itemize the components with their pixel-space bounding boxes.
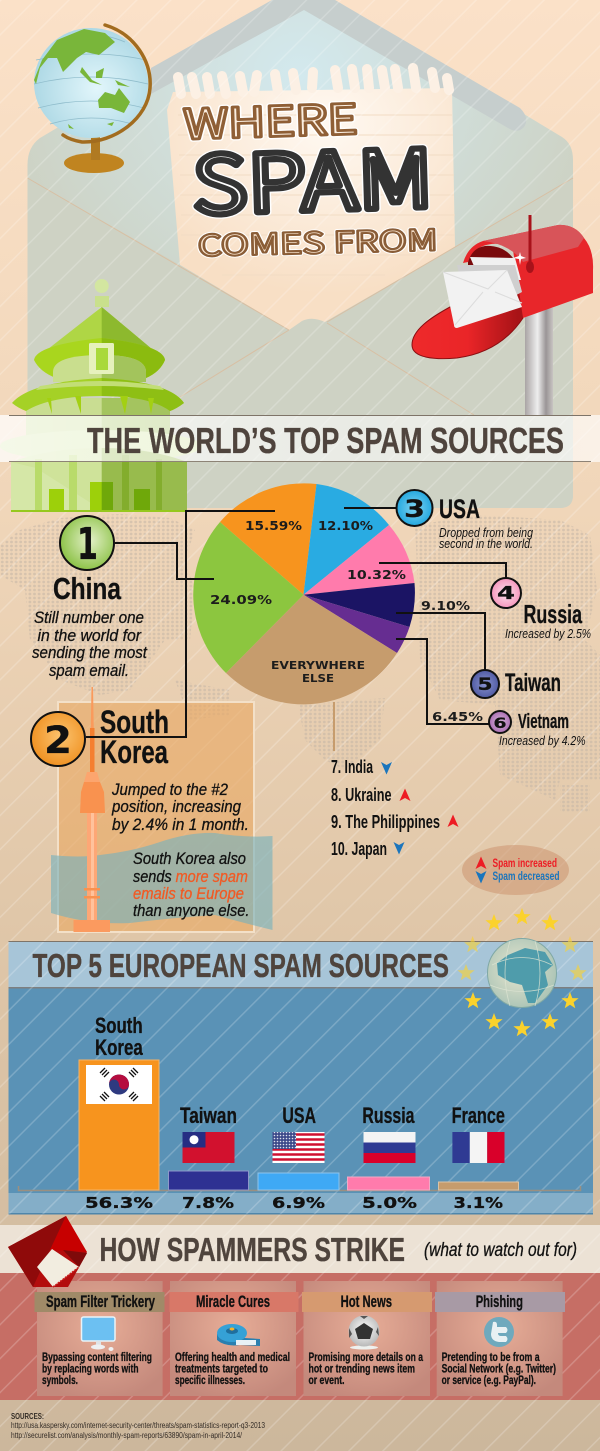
icon: seoul tower	[74, 687, 110, 932]
bar: south korea: 56.3%	[85, 1194, 153, 1212]
title: comes from: COMES FROM	[197, 217, 438, 265]
south korea label: South	[100, 704, 169, 740]
rank 4: russia: 4	[497, 583, 515, 604]
rank 5: taiwan: Taiwan	[505, 669, 561, 697]
flag: taiwan	[182, 1132, 234, 1163]
bar: france: 3.1%	[454, 1194, 503, 1212]
rank 3: usa: USA	[439, 494, 480, 524]
legend	[462, 845, 569, 895]
pin line to list	[333, 702, 335, 751]
rank 3: usa: second in the world.	[439, 537, 533, 551]
rank 6: vietnam: 6	[494, 716, 506, 732]
china description: in the world for	[38, 626, 142, 645]
torn note paper	[167, 68, 455, 330]
bar: taiwan	[168, 1103, 248, 1212]
bar: russia: 5.0%	[362, 1194, 417, 1212]
red panel background	[0, 1273, 600, 1400]
pie labels	[210, 518, 484, 724]
badge 2: 2	[44, 719, 72, 762]
pie labels: 10.32%	[347, 567, 407, 582]
bar: south korea: South	[95, 1013, 143, 1038]
china description: Still number one	[34, 608, 144, 627]
card: miracle cures: Offering health and medical	[175, 1350, 290, 1364]
pie labels: ELSE	[302, 673, 334, 685]
south korea description	[111, 780, 249, 834]
ranks 7 to 10 list: 9. The Philippines	[331, 812, 440, 832]
legend: Spam increased	[492, 856, 557, 870]
rank 6: vietnam: Increased by 4.2%	[499, 734, 586, 748]
south korea description: Jumped to the #2	[111, 780, 228, 799]
card: hot news: or event.	[308, 1373, 344, 1387]
china label: China	[53, 571, 122, 606]
icon: red envelope with note	[8, 1216, 87, 1287]
heading band	[0, 1225, 600, 1273]
bar: south korea	[79, 1013, 159, 1212]
title: where: WHERE	[182, 86, 358, 151]
icon: europe globe	[488, 938, 556, 1008]
rank 1: china	[32, 516, 148, 680]
pie labels: 12.10%	[318, 518, 373, 533]
mailbox post	[525, 308, 553, 415]
title	[182, 86, 438, 265]
card: spam filter trickery	[34, 1281, 164, 1396]
rank 2: south korea: Korea	[100, 734, 168, 770]
ranks 7 to 10 list: 8. Ukraine	[331, 785, 392, 805]
south korea description: position, increasing	[111, 797, 241, 816]
card: miracle cures	[170, 1281, 298, 1396]
orange callout box: south korea	[51, 687, 272, 932]
china description	[32, 608, 148, 680]
card: phishing	[435, 1281, 565, 1396]
flag: south korea	[86, 1065, 152, 1104]
title: spam: SPAM	[190, 115, 435, 238]
europe note: emails to Europe	[133, 884, 244, 903]
card: hot news	[302, 1281, 432, 1396]
icon: eu stars	[457, 908, 587, 1036]
section band: world's top spam sources	[0, 415, 600, 462]
badge 1: 1	[77, 519, 98, 570]
icon: monitor	[82, 1317, 115, 1351]
south korea description: by 2.4% in 1 month.	[112, 815, 249, 834]
legend: Spam decreased	[492, 869, 560, 883]
icon: twitter bird badge	[484, 1317, 514, 1347]
rank 2: south korea	[31, 704, 250, 920]
panel: how spammers strike	[0, 1216, 600, 1400]
heading: TOP 5 EUROPEAN SPAM SOURCES	[32, 947, 449, 984]
title: comes from: COMES FROM	[197, 217, 438, 265]
badge 2	[31, 712, 85, 766]
card: spam filter trickery: Spam Filter Trickery	[46, 1292, 155, 1311]
bar: russia: Russia	[362, 1103, 415, 1128]
dotted world map	[0, 514, 600, 812]
card: spam filter trickery: Bypassing content filtering	[42, 1350, 152, 1364]
bar: usa: USA	[282, 1103, 316, 1128]
icon: measuring tape	[217, 1324, 260, 1346]
sources: http://usa.kaspersky.com/internet-security-center/threats/spam-statistics-report-q3-2013	[11, 1421, 265, 1430]
mailbox lower lobe	[412, 290, 523, 359]
card: miracle cures: Miracle Cures	[196, 1292, 270, 1311]
card: spam filter trickery: symbols.	[42, 1373, 78, 1387]
bar: taiwan: Taiwan	[180, 1103, 237, 1128]
pie labels: 15.59%	[245, 518, 303, 533]
rank 3: usa: Dropped from being	[439, 526, 533, 540]
bar: usa: 6.9%	[272, 1194, 325, 1212]
flag: france	[452, 1132, 504, 1163]
sources	[11, 1412, 265, 1440]
ribbon	[51, 833, 272, 930]
rank 5: taiwan	[471, 669, 561, 698]
bar: south korea: Korea	[95, 1035, 143, 1060]
rank 3: usa: 3	[404, 495, 425, 523]
china description: sending the most	[32, 643, 148, 662]
pie labels: EVERYWHERE	[271, 660, 365, 672]
pie labels: 24.09%	[210, 592, 273, 607]
mailbox flag	[528, 215, 532, 265]
europe note: than anyone else.	[133, 901, 250, 920]
card: hot news: Promising more details on a	[308, 1350, 423, 1364]
title: spam: SPAM	[190, 115, 435, 238]
card: phishing: Social Network (e.g. Twitter)	[442, 1362, 556, 1376]
icon: green temple	[0, 279, 202, 512]
ranks 7 to 10 list	[331, 757, 458, 859]
china description: spam email.	[49, 661, 129, 680]
europe note	[133, 849, 250, 920]
rank 6: vietnam	[489, 711, 586, 748]
bar: taiwan: 7.8%	[182, 1194, 234, 1212]
rank 4: russia	[491, 578, 591, 641]
axis	[18, 1186, 580, 1190]
card: miracle cures: specific illnesses.	[175, 1373, 245, 1387]
mailbox body	[463, 225, 593, 318]
icon: desk globe	[34, 25, 150, 173]
badge 1	[60, 516, 114, 570]
card: phishing: Phishing	[476, 1292, 523, 1311]
panel: top 5 european spam sources	[8, 908, 593, 1214]
connector lines	[86, 508, 506, 737]
flag: usa	[272, 1132, 324, 1163]
card: spam filter trickery: by replacing words with	[42, 1362, 138, 1376]
europe note: South Korea also	[133, 849, 246, 868]
europe note: sends more spam	[133, 867, 248, 886]
card: miracle cures: treatments targeted to	[175, 1362, 268, 1376]
card: hot news: Hot News	[341, 1292, 392, 1311]
title: spam: SPAM	[190, 115, 435, 238]
title: where: WHERE	[182, 86, 358, 151]
mailbox letters	[470, 257, 521, 280]
sources: http://securelist.com/analysis/monthly-spam-reports/63890/spam-in-april-2014/	[11, 1431, 243, 1440]
title: where: WHERE	[182, 86, 358, 151]
card: hot news: hot or trending news item	[308, 1362, 415, 1376]
card: phishing: or service (e.g. PayPal).	[442, 1373, 536, 1387]
envelope flap band	[151, 0, 526, 131]
envelope front flaps	[28, 178, 573, 508]
bar: usa	[258, 1103, 339, 1212]
pie labels: 6.45%	[432, 709, 484, 724]
rank 3: usa	[396, 490, 533, 551]
bar: russia	[348, 1103, 430, 1212]
bar: france	[438, 1103, 518, 1212]
icon: red mailbox	[412, 215, 593, 415]
sources: SOURCES:	[11, 1412, 44, 1421]
icon: soccer ball	[348, 1316, 380, 1350]
rank 6: vietnam: Vietnam	[518, 711, 569, 733]
bar: france: France	[452, 1103, 505, 1128]
heading band: HOW SPAMMERS STRIKE	[100, 1231, 405, 1268]
title: comes from: COMES FROM	[197, 217, 438, 265]
card: phishing: Pretending to be from a	[442, 1350, 540, 1364]
flag: russia	[364, 1132, 416, 1163]
envelope	[28, 0, 573, 508]
ranks 7 to 10 list: 7. India	[331, 757, 374, 777]
pie labels: 9.10%	[421, 598, 471, 613]
ranks 7 to 10 list: 10. Japan	[331, 839, 387, 859]
rank 5: taiwan: 5	[478, 675, 492, 694]
pie chart	[193, 483, 484, 724]
